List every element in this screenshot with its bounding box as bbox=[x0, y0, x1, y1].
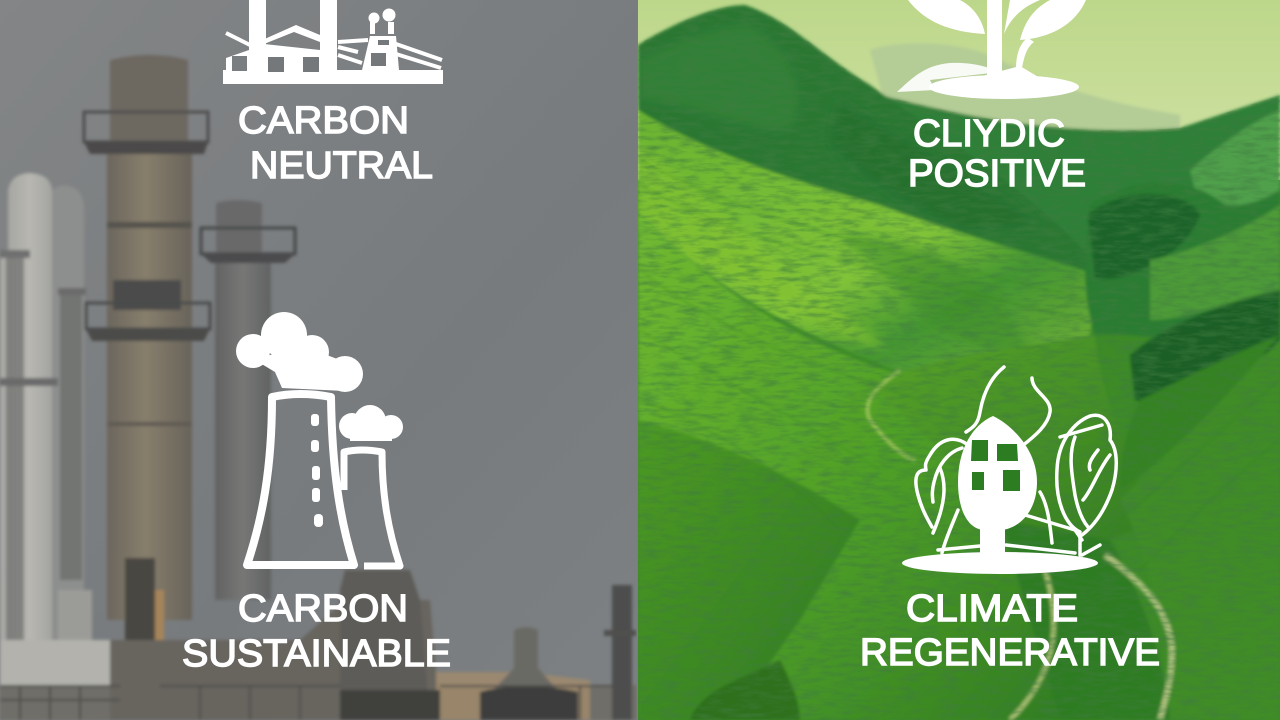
heading: climate positive: CLIYDIC bbox=[913, 113, 1065, 155]
foliage grain texture bbox=[638, 0, 1280, 720]
terrace lines bbox=[642, 162, 1076, 433]
left pale towers bbox=[0, 173, 110, 690]
heading: carbon neutral bbox=[238, 100, 433, 187]
icon: seedling on ground bbox=[897, 0, 1086, 99]
panel: green hills photo background bbox=[638, 0, 1280, 720]
right lower slopes bbox=[1130, 340, 1280, 702]
panel: industrial photo background bbox=[0, 0, 637, 720]
heading: carbon neutral: CARBON bbox=[238, 100, 409, 142]
heading: carbon sustainable: SUSTAINABLE bbox=[182, 633, 451, 675]
heading: climate regenerative: CLIMATE bbox=[906, 588, 1078, 630]
terraced upper hill bbox=[638, 110, 1097, 374]
dark forest hill bbox=[638, 2, 886, 204]
heading: carbon sustainable: CARBON bbox=[238, 588, 408, 630]
far ridge behind hills bbox=[886, 93, 1280, 250]
heading: climate positive bbox=[908, 113, 1086, 195]
icon: cooling towers with smoke bbox=[236, 312, 403, 566]
icon: factory with bridge bbox=[223, 0, 443, 84]
heading: climate positive: POSITIVE bbox=[908, 153, 1086, 195]
heading: carbon sustainable bbox=[182, 588, 451, 675]
foreground plant structures bbox=[0, 558, 637, 720]
misty distant tree line bbox=[871, 44, 1182, 132]
second chimney bbox=[201, 200, 295, 600]
forest clump right bbox=[1085, 182, 1280, 344]
left lower slope bbox=[638, 210, 1090, 720]
bush bottom bbox=[690, 660, 800, 720]
shadow valley on terraces bbox=[842, 234, 1028, 349]
icon: globe with leaves bbox=[902, 367, 1116, 574]
main chimney bbox=[84, 55, 210, 620]
heading: climate regenerative bbox=[860, 588, 1160, 674]
winding road bbox=[1105, 555, 1172, 720]
central middle slopes bbox=[899, 336, 1105, 440]
heading: climate regenerative: REGENERATIVE bbox=[860, 632, 1160, 674]
heading: carbon neutral: NEUTRAL bbox=[250, 145, 433, 187]
bright terrace band bbox=[638, 140, 890, 350]
